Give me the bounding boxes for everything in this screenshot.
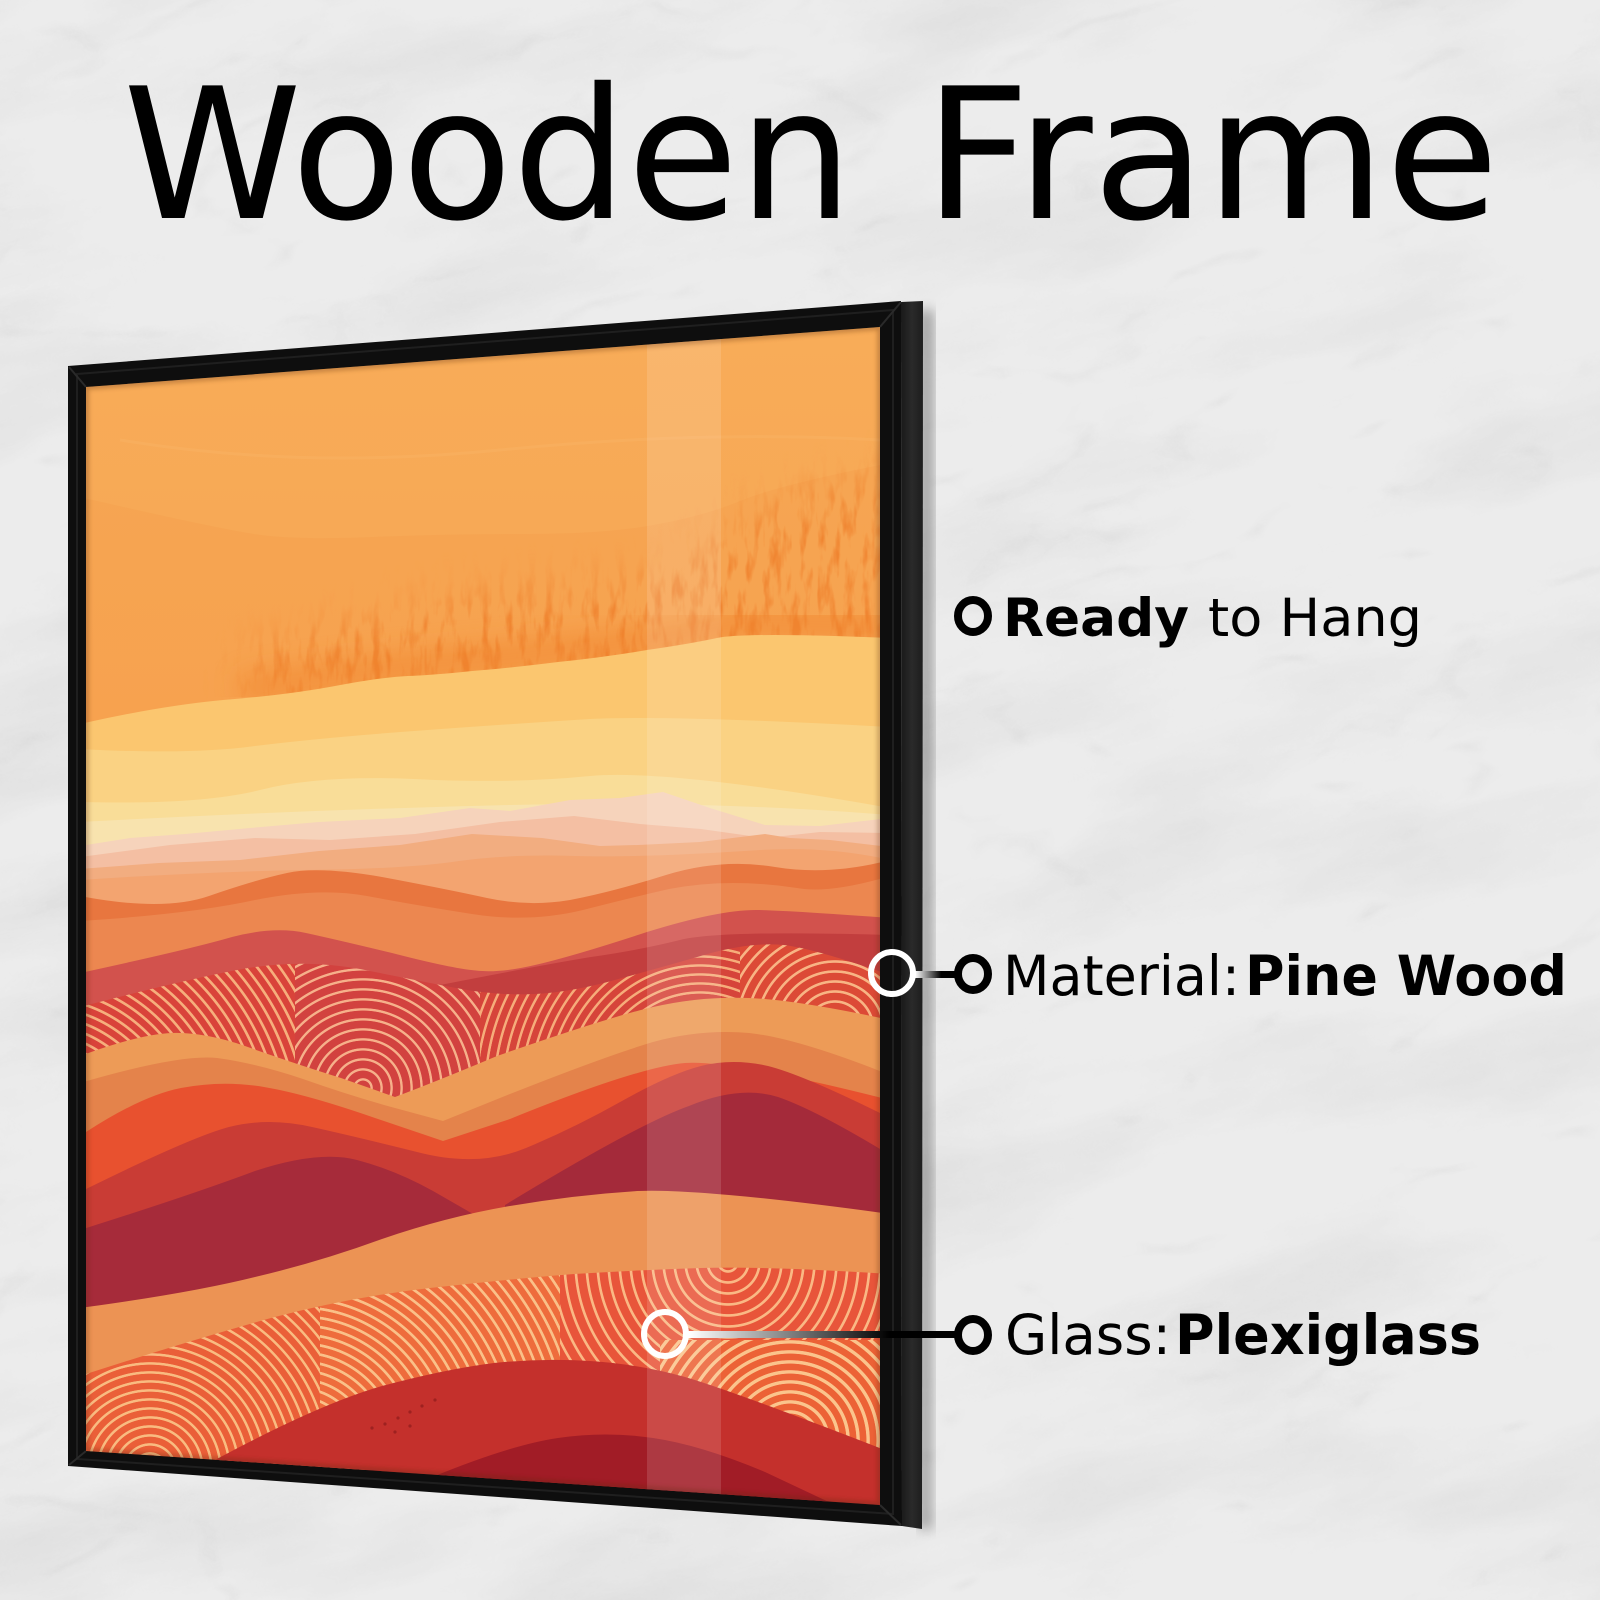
label rest: to Hang: [1208, 588, 1422, 649]
deep red hill: [86, 1062, 880, 1228]
yellow band: [86, 635, 880, 752]
connector line: [688, 1331, 960, 1338]
dotted hill details: [370, 1398, 437, 1434]
marker: [958, 958, 988, 990]
lighter orange hill: [86, 879, 880, 972]
callout: glass: [644, 1303, 1481, 1367]
label: Material:: [1003, 944, 1240, 1008]
red hill foreground: [216, 1360, 880, 1505]
frame bevel highlight: [77, 310, 893, 1514]
glass glare strip: [647, 320, 721, 1520]
marker: [958, 600, 988, 632]
peach mountains: [86, 834, 880, 880]
orange grain texture: [256, 471, 880, 692]
crimson hill left: [86, 1156, 472, 1308]
palest band: [86, 804, 880, 845]
dark red strip: [441, 934, 880, 994]
white ring on glass: [644, 1312, 686, 1356]
title: Wooden: [123, 49, 853, 261]
tan hills: [86, 849, 880, 904]
pale yellow band: [86, 718, 880, 806]
frame front face: [68, 301, 902, 1526]
value: Plexiglass: [1175, 1303, 1481, 1367]
framed artwork: [68, 301, 923, 1600]
orange ribbon: [86, 1032, 880, 1141]
deep crimson foreground: [438, 1434, 826, 1502]
frame side face: [901, 301, 923, 1529]
label: Ready: [1003, 588, 1189, 649]
red-orange hill: [86, 1062, 880, 1189]
tan ribbon lower: [86, 1190, 880, 1374]
title: Frame: [924, 49, 1499, 261]
label: Glass:: [1005, 1303, 1171, 1367]
white ring on frame: [871, 952, 913, 994]
cream band: [86, 775, 880, 822]
callout: ready to hang: [958, 588, 1422, 649]
title: [123, 49, 1499, 261]
artwork: desert landscape: [80, 320, 890, 1600]
orange band: [86, 720, 98, 723]
inner frame shadow: [86, 327, 880, 1505]
marker: [958, 1319, 988, 1351]
tan ribbon: [86, 998, 880, 1121]
connector line: [915, 971, 960, 978]
pink mountains: [86, 816, 880, 868]
sky: [86, 327, 880, 538]
patterned band upper: [86, 944, 880, 1097]
distant pink mountains: [86, 792, 880, 856]
callout: material: [871, 944, 1567, 1008]
patterned band lower: [86, 1268, 880, 1470]
crimson hill right: [505, 1092, 880, 1212]
sky brush wave: [120, 437, 880, 458]
dark orange edge glow: [240, 622, 890, 690]
frame drop shadow: [918, 310, 934, 1530]
value: Pine Wood: [1245, 944, 1567, 1008]
orange hill: [86, 862, 880, 920]
red band: [86, 910, 880, 1006]
frame corner miters: [69, 302, 901, 1525]
